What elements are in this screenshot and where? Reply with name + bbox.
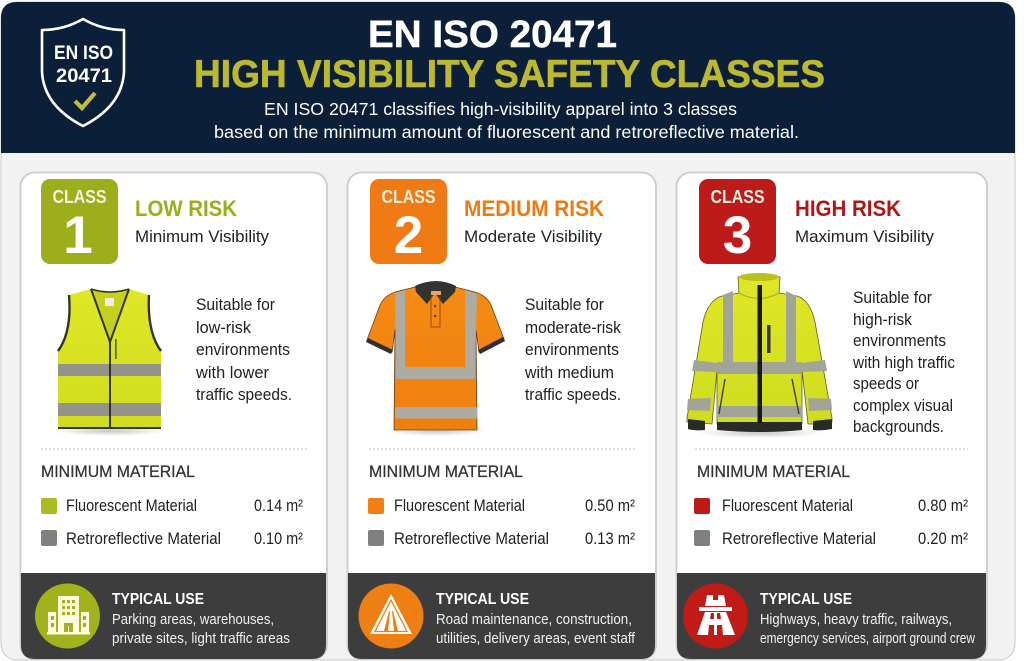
description: environments xyxy=(853,332,946,350)
panel: class 3 xyxy=(676,172,987,659)
visibility label: Maximum Visibility xyxy=(795,228,935,246)
row: fluorescent material: 0.50 m² xyxy=(585,497,635,515)
description: environments xyxy=(525,341,619,359)
icon: shield badge xyxy=(42,19,124,126)
description: speeds or xyxy=(853,375,919,393)
description: Suitable for xyxy=(196,296,275,314)
typical use text: TYPICAL USE xyxy=(112,591,204,608)
panel: class 2 xyxy=(348,172,656,659)
minimum material heading: MINIMUM MATERIAL xyxy=(369,463,523,481)
typical use text xyxy=(760,591,975,647)
typical use text xyxy=(436,591,636,647)
typical use text: Road maintenance, construction, xyxy=(436,612,632,628)
description: traffic speeds. xyxy=(196,386,292,404)
class 1 badge: CLASS xyxy=(52,187,106,207)
description: with high traffic xyxy=(852,354,955,372)
typical use text: Highways, heavy traffic, railways, xyxy=(760,612,952,628)
subtitle heading: HIGH VISIBILITY SAFETY CLASSES xyxy=(194,53,825,96)
typical use text: Parking areas, warehouses, xyxy=(112,612,274,628)
description: low-risk xyxy=(196,319,252,337)
description: with lower xyxy=(195,364,269,382)
row: fluorescent material: Fluorescent Material xyxy=(66,497,197,515)
row: retroreflective material: Retroreflective Material xyxy=(66,530,221,548)
typical use text: TYPICAL USE xyxy=(760,591,852,608)
icon: orange polo shirt xyxy=(367,281,504,436)
icon: shield badge: EN ISO xyxy=(54,43,113,64)
description: Suitable for xyxy=(853,289,932,307)
icon: buildings xyxy=(35,584,100,648)
description: traffic speeds. xyxy=(525,386,621,404)
icon: shield badge: 20471 xyxy=(56,66,112,87)
typical use footer xyxy=(677,573,986,659)
intro text: based on the minimum amount of fluorescent and retroreflective material. xyxy=(214,122,799,142)
icon: yellow vest xyxy=(54,289,166,436)
risk heading: HIGH RISK xyxy=(795,196,901,221)
description xyxy=(852,289,955,436)
row: retroreflective material: Retroreflective Material xyxy=(394,530,549,548)
row: fluorescent material: 0.14 m² xyxy=(254,497,303,515)
title: EN ISO 20471 xyxy=(368,14,617,56)
description: environments xyxy=(196,341,290,359)
panel: class 1 xyxy=(20,172,327,659)
class 1 badge xyxy=(41,179,118,265)
description: with medium xyxy=(524,364,614,382)
typical use text: emergency services, airport ground crew xyxy=(760,631,975,647)
row: fluorescent material: Fluorescent Material xyxy=(722,497,853,515)
intro text: EN ISO 20471 classifies high-visibility apparel into 3 classes xyxy=(264,99,737,119)
row: fluorescent material xyxy=(41,497,303,515)
row: retroreflective material: 0.10 m² xyxy=(254,530,303,548)
description: Suitable for xyxy=(525,296,604,314)
class 2 badge: 2 xyxy=(394,206,423,265)
intro text xyxy=(214,99,799,142)
class 2 badge xyxy=(370,179,447,265)
row: fluorescent material xyxy=(368,497,635,515)
visibility label: Minimum Visibility xyxy=(135,228,270,246)
description xyxy=(195,296,292,404)
row: retroreflective material: Retroreflective Material xyxy=(722,530,876,548)
row: retroreflective material: 0.20 m² xyxy=(918,530,968,548)
class 2 badge: CLASS xyxy=(382,187,436,207)
icon: highway xyxy=(683,584,748,648)
row: fluorescent material: Fluorescent Material xyxy=(394,497,525,515)
risk heading: MEDIUM RISK xyxy=(464,196,604,221)
row: fluorescent material xyxy=(694,497,968,515)
typical use text: utilities, delivery areas, event staff xyxy=(436,631,636,647)
header banner xyxy=(1,2,1015,153)
typical use text: private sites, light traffic areas xyxy=(112,631,290,647)
icon: road xyxy=(358,584,424,648)
icon: yellow jacket xyxy=(687,273,832,438)
row: retroreflective material xyxy=(41,530,303,548)
description: complex visual xyxy=(853,397,953,415)
class 3 badge: 3 xyxy=(723,206,752,265)
typical use footer xyxy=(348,573,655,659)
class 1 badge: 1 xyxy=(63,206,93,265)
minimum material heading: MINIMUM MATERIAL xyxy=(697,463,850,481)
typical use text xyxy=(112,591,290,647)
class 3 badge: CLASS xyxy=(710,187,764,207)
row: retroreflective material xyxy=(368,530,635,548)
typical use text: TYPICAL USE xyxy=(436,591,529,608)
typical use footer xyxy=(21,573,326,659)
description xyxy=(524,296,622,404)
row: retroreflective material xyxy=(694,530,968,548)
risk heading: LOW RISK xyxy=(135,196,237,221)
description: moderate-risk xyxy=(525,319,622,337)
visibility label: Moderate Visibility xyxy=(464,228,603,246)
description: backgrounds. xyxy=(853,418,944,436)
description: high-risk xyxy=(853,311,913,329)
class 3 badge xyxy=(699,179,776,265)
row: retroreflective material: 0.13 m² xyxy=(585,530,635,548)
minimum material heading: MINIMUM MATERIAL xyxy=(41,463,195,481)
row: fluorescent material: 0.80 m² xyxy=(918,497,968,515)
